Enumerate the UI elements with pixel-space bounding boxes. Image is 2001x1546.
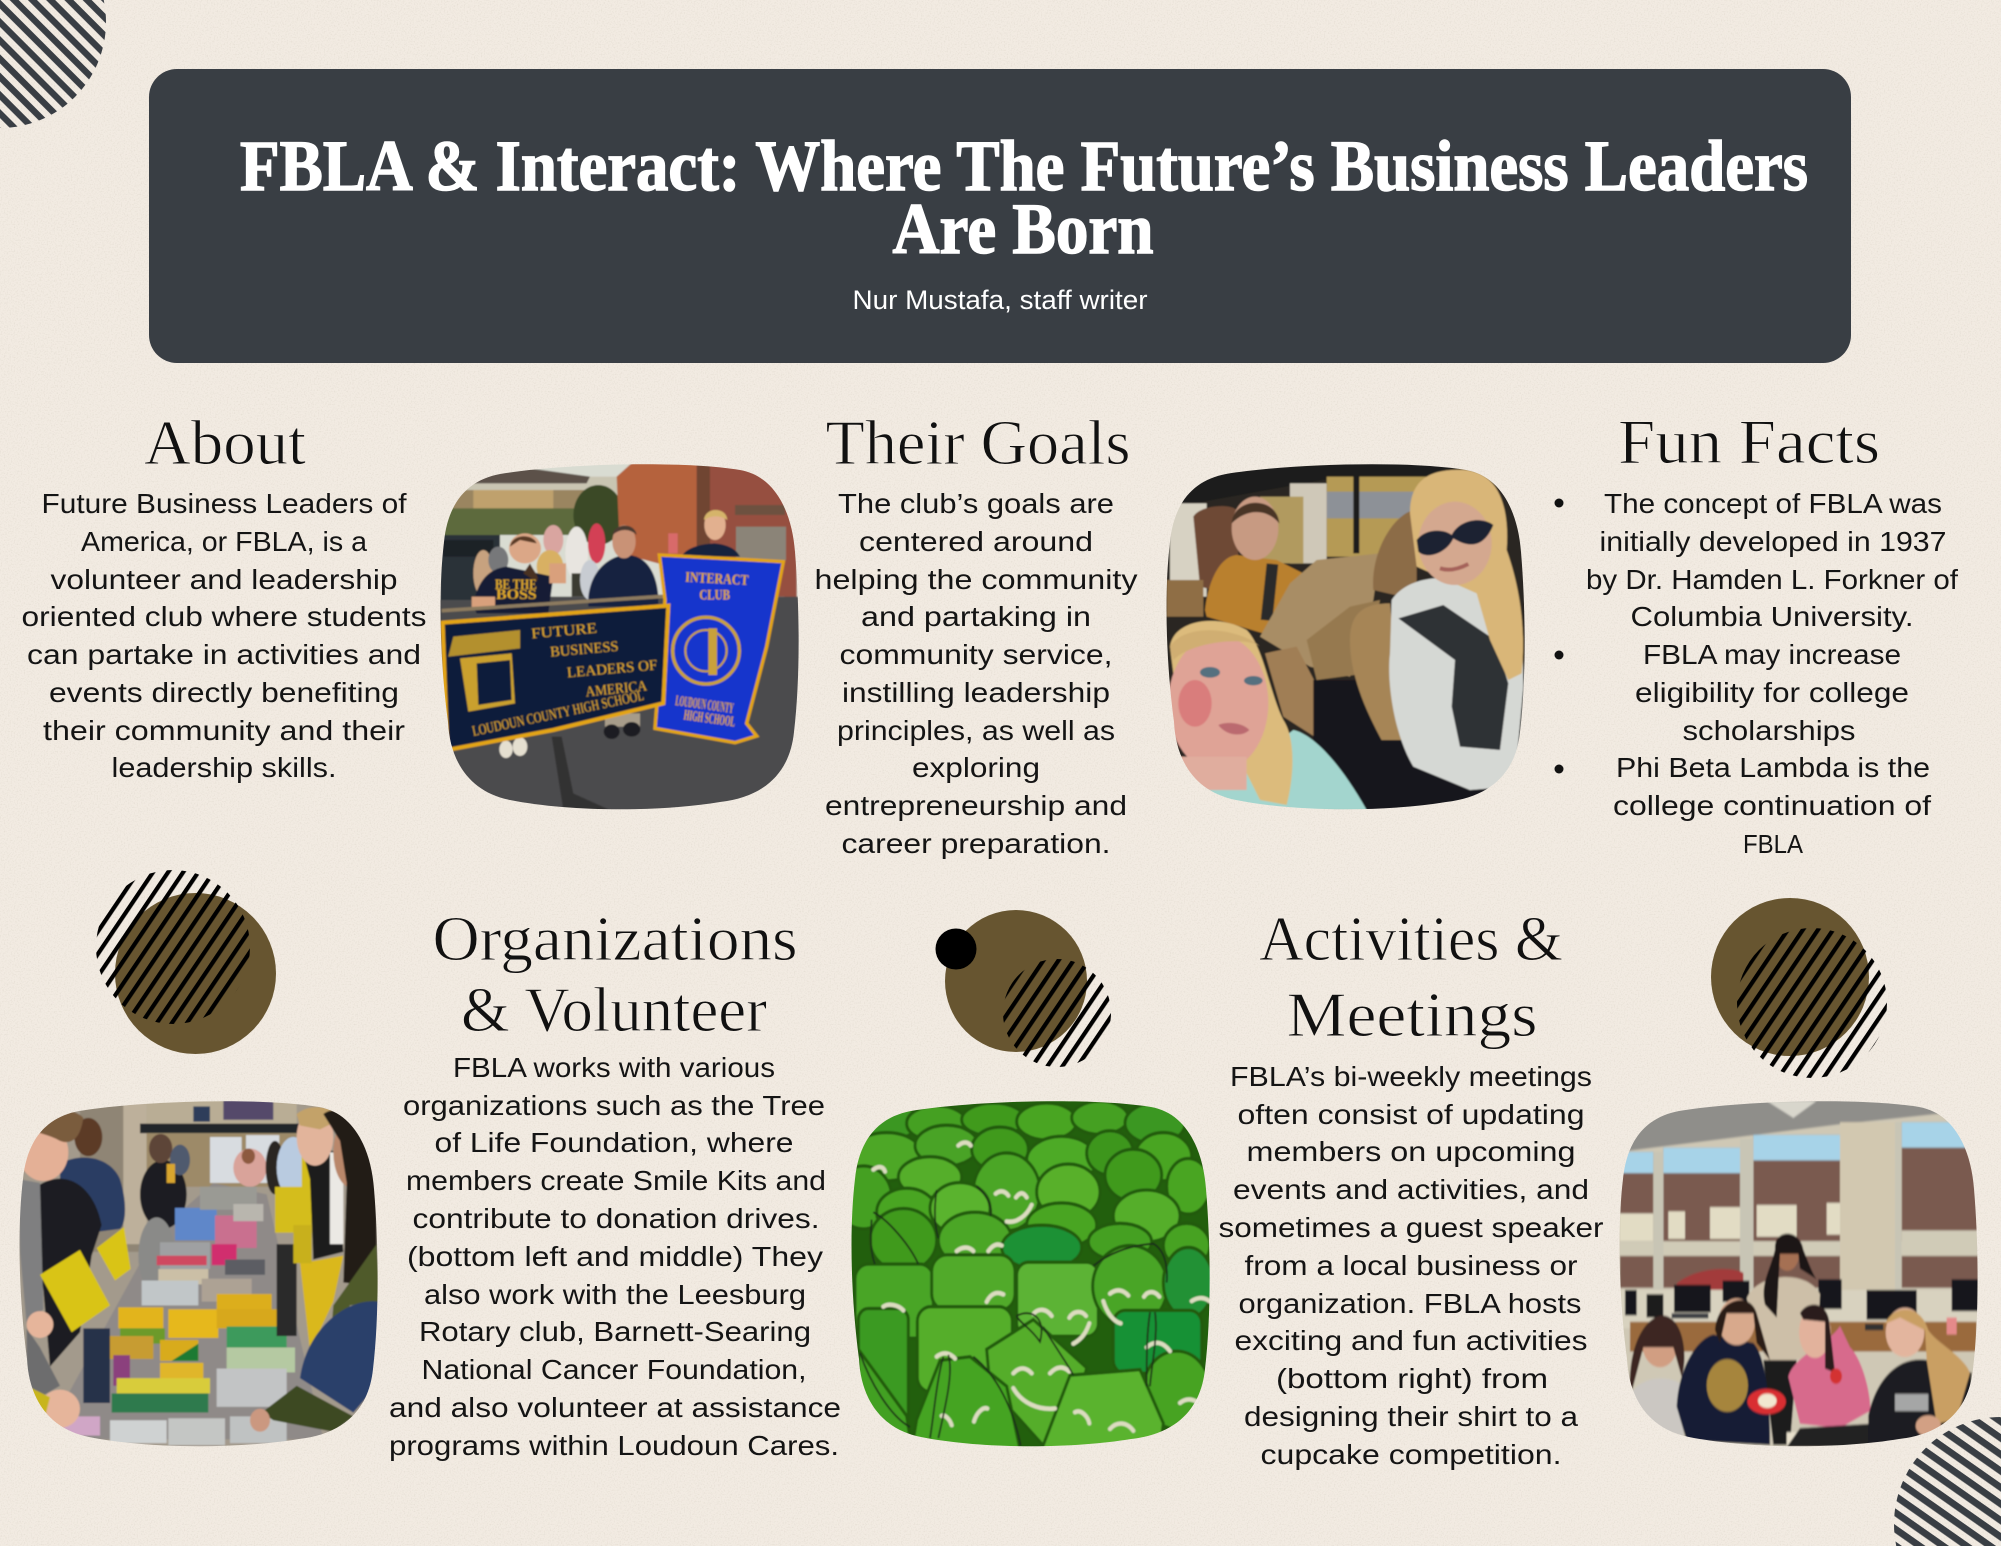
text block: about: can partake in activities and (27, 639, 421, 670)
photo: club banners: BUSINESS (550, 639, 619, 661)
left boys (60, 1158, 125, 1233)
text block: organizations: FBLA works with various (453, 1052, 775, 1083)
photo: club banners: INTERACT (685, 570, 749, 589)
heading: about: About (144, 407, 306, 478)
text block: goals (814, 488, 1138, 859)
text block: activities: members on upcoming (1246, 1136, 1576, 1167)
title: Are Born (892, 189, 1154, 269)
text block: about: their community and their (43, 715, 405, 746)
photo: club banners: AMERICA (585, 678, 648, 701)
text block: organizations: contribute to donation drives. (412, 1203, 820, 1234)
heading: their goals: Their Goals (826, 407, 1130, 478)
crowd (473, 550, 493, 597)
photo: students in car (1166, 464, 1525, 810)
heading: activities and meetings (1259, 903, 1563, 1050)
text block: organizations: Rotary club, Barnett-Searing (419, 1316, 811, 1347)
photo: club banners: LOUDOUN COUNTY (674, 693, 735, 717)
photo: club banners: CLUB (699, 587, 730, 603)
text block: goals: helping the community (814, 564, 1138, 595)
standing student (1747, 1277, 1820, 1364)
crayons (118, 1307, 163, 1328)
header banner (149, 69, 1851, 363)
bullet list: Columbia University. (1630, 601, 1914, 632)
text block: goals: centered around (859, 526, 1093, 557)
text block: about: volunteer and leadership (50, 564, 398, 595)
back passenger (1205, 555, 1303, 633)
bullet list: FBLA may increase (1643, 639, 1901, 670)
panel: their goals (814, 407, 1138, 859)
heading: fun facts: Fun Facts (1618, 406, 1880, 477)
shoes and trousers (605, 713, 640, 727)
bullet list: initially developed in 1937 (1600, 526, 1946, 557)
text block: about: events directly benefiting (49, 677, 399, 708)
photo: club banners: BOSS (496, 587, 537, 603)
bullet list: Phi Beta Lambda is the (1616, 752, 1930, 783)
text block: organizations: (bottom left and middle) They (407, 1241, 823, 1272)
pole (442, 594, 700, 611)
photo: club banners: BE THE (495, 577, 537, 593)
bullet list (1554, 488, 1958, 859)
text block: activities: designing their shirt to a (1244, 1401, 1579, 1432)
bullet list: by Dr. Hamden L. Forkner of (1586, 564, 1958, 595)
black sweatshirt student (1868, 1359, 1972, 1445)
right students (300, 1141, 343, 1259)
text block: goals: entrepreneurship and (825, 790, 1127, 821)
heading: activities and meetings: Activities & (1259, 903, 1563, 974)
text block: activities: cupcake competition. (1260, 1439, 1562, 1470)
table (43, 1183, 323, 1439)
bullet list: college continuation of (1613, 790, 1931, 821)
text block: organizations: also work with the Leesburg (424, 1279, 806, 1310)
text block: goals: exploring (912, 752, 1040, 783)
title (240, 126, 1808, 269)
text block: activities: FBLA’s bi-weekly meetings (1230, 1061, 1592, 1092)
heading: activities and meetings: Meetings (1286, 979, 1538, 1050)
text block: about: oriented club where students (22, 601, 426, 632)
bullet list: FBLA (1743, 831, 1803, 859)
text block: activities: events and activities, and (1233, 1174, 1589, 1205)
text block: organizations: organizations such as the Tree (403, 1090, 825, 1121)
photo: club banners: HIGH SCHOOL (683, 707, 736, 730)
panel: about (22, 407, 426, 783)
decoration: brown circle with stripes left (90, 865, 276, 1054)
text block: activities: (bottom right) from (1276, 1363, 1548, 1394)
text block: goals: and partaking in (861, 601, 1091, 632)
heading: organizations and volunteer (432, 903, 798, 1045)
text block: organizations: programs within Loudoun Cares. (389, 1430, 839, 1461)
text block: about: leadership skills. (112, 752, 336, 783)
text block: organizations: of Life Foundation, where (434, 1127, 794, 1158)
text block: organizations: members create Smile Kits and (406, 1165, 826, 1196)
photo: green smile kit bags (830, 1090, 1230, 1460)
text block: activities (1218, 1061, 1604, 1470)
teacher (588, 555, 658, 607)
panel: fun facts (1554, 406, 1958, 859)
text block: organizations (389, 1052, 841, 1461)
text block: goals: community service, (840, 639, 1112, 670)
boy (704, 510, 726, 540)
chairs (277, 1244, 297, 1336)
desk and monitors (1620, 1290, 1978, 1328)
front selfie girl (1208, 728, 1368, 810)
title: FBLA & Interact: Where The Future’s Business Leaders (240, 126, 1808, 206)
seated left student (1628, 1378, 1683, 1436)
panel: activities and meetings (1218, 903, 1604, 1470)
boy in black at the back (140, 1160, 187, 1229)
text block: organizations: and also volunteer at assistance (389, 1392, 841, 1423)
byline: Nur Mustafa, staff writer (852, 285, 1148, 315)
photo: club banners (440, 464, 799, 810)
text block: goals: career preparation. (842, 828, 1110, 859)
text block: activities: organization. FBLA hosts (1238, 1288, 1582, 1319)
heading: organizations and volunteer: & Volunteer (461, 974, 767, 1045)
photo: club banners: FUTURE (531, 621, 598, 642)
bullet list: The concept of FBLA was (1604, 488, 1942, 519)
right background people (233, 1149, 267, 1187)
photo: club members in classroom (1600, 1092, 2001, 1475)
heading: organizations and volunteer: Organizations (432, 903, 798, 974)
driver: hoodie and vest (1389, 578, 1523, 790)
bullet list: eligibility for college (1635, 677, 1909, 708)
photo: club banners: LOUDOUN COUNTY HIGH SCHOOL (471, 688, 645, 740)
decoration: striped circle bottom right (1890, 1410, 2001, 1546)
text block: activities: often consist of updating (1238, 1099, 1584, 1130)
photo: club banners: LEADERS OF (566, 657, 658, 681)
text block: about: Future Business Leaders of (42, 488, 407, 519)
photo: students packing supplies (20, 1101, 378, 1446)
paper bags (1260, 553, 1380, 677)
panel: organizations and volunteer (389, 903, 841, 1461)
text block: organizations: National Cancer Foundation, (422, 1354, 806, 1385)
text block: activities: sometimes a guest speaker (1218, 1212, 1604, 1243)
text block: about (22, 488, 426, 783)
decoration: striped circle top left (0, 0, 110, 130)
right seat and dark footwell (1312, 679, 1380, 802)
left student (473, 567, 553, 613)
blue interact banner (655, 555, 783, 743)
bullet list: scholarships (1682, 715, 1856, 746)
decoration: brown circle with stripes right (1711, 898, 1890, 1080)
text block: activities: exciting and fun activities (1234, 1325, 1588, 1356)
text block: activities: from a local business or (1244, 1250, 1578, 1281)
text block: goals: instilling leadership (842, 677, 1110, 708)
navy hoodie student (1677, 1335, 1770, 1445)
text block: goals: The club’s goals are (838, 488, 1114, 519)
text block: about: America, or FBLA, is a (81, 526, 368, 557)
decoration: brown circle with dot and stripes centre (936, 910, 1115, 1070)
windows (1620, 1152, 1653, 1288)
pink hoodie student (1788, 1326, 1870, 1428)
stacks on table (175, 1208, 217, 1240)
text block: goals: principles, as well as (837, 715, 1115, 746)
drawstrings and smiles (873, 1142, 1209, 1431)
navy fbla banner (443, 606, 668, 750)
